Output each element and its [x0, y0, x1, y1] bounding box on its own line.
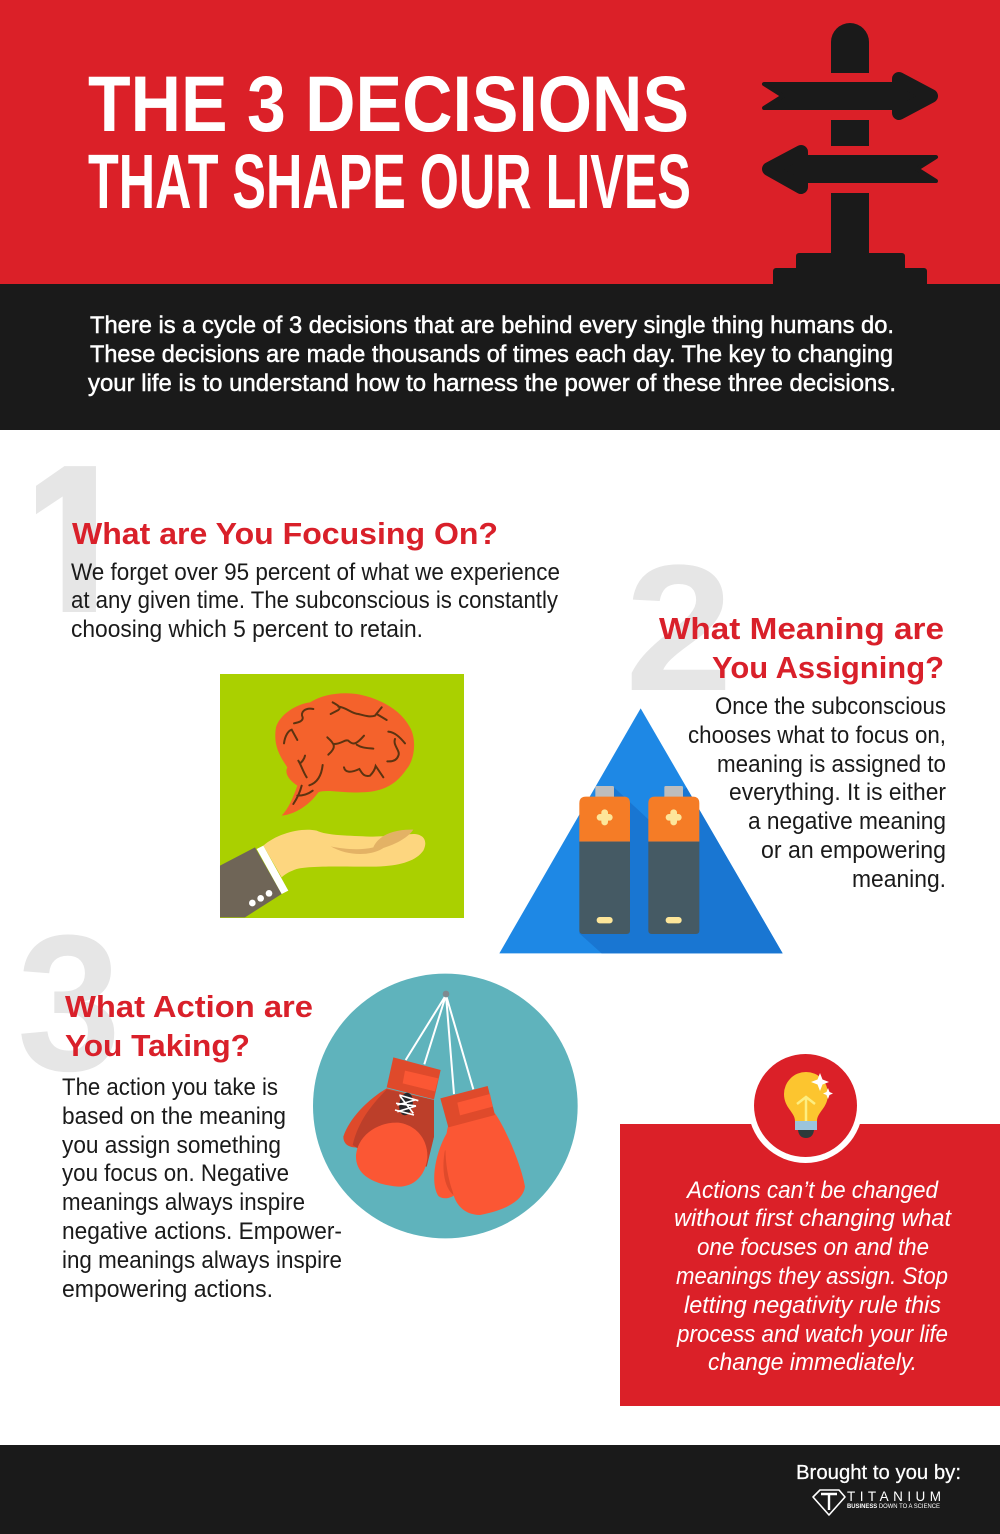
heading: action: [65, 989, 313, 1063]
text: action: you assign something: [62, 1132, 281, 1159]
text: focusing: at any given time. The subconscious is constantly: [71, 587, 558, 614]
intro text: These decisions are made thousands of times each day. The key to changing: [90, 341, 893, 368]
logo: titanium: TITANIUM: [847, 1489, 941, 1504]
heading: meaning: You Assigning?: [712, 650, 944, 685]
title: THE 3 DECISIONS: [88, 59, 689, 148]
callout text: Actions can’t be changed: [685, 1177, 939, 1204]
icon: light bulb: [748, 1048, 863, 1163]
number 2: 2: [625, 528, 733, 729]
callout text: letting negativity rule this: [684, 1292, 941, 1319]
text: meaning: a negative meaning: [748, 808, 946, 835]
text: action: empowering actions.: [62, 1276, 273, 1303]
text: action: The action you take is: [62, 1074, 278, 1101]
logo: titanium: BUSINESS DOWN TO A SCIENCE: [847, 1503, 941, 1510]
text: focusing: We forget over 95 percent of what we experience: [71, 559, 560, 586]
icon: brain above hand: [220, 674, 464, 918]
footer: [0, 1445, 1000, 1534]
text: action: negative actions. Empower-: [62, 1218, 342, 1245]
title: [88, 59, 691, 225]
intro band: [0, 284, 1000, 430]
text: focusing: [71, 559, 560, 643]
battery left: [579, 786, 630, 934]
text: meaning: Once the subconscious: [715, 693, 946, 720]
callout text: meanings they assign. Stop: [676, 1263, 948, 1290]
text: action: ing meanings always inspire: [62, 1247, 342, 1274]
callout text: process and watch your life: [676, 1321, 948, 1348]
text: action: meanings always inspire: [62, 1189, 305, 1216]
text: action: based on the meaning: [62, 1103, 286, 1130]
left glove: [343, 1057, 441, 1187]
intro text: [88, 312, 896, 397]
text: meaning: meaning is assigned to: [717, 751, 946, 778]
number 3: 3: [17, 895, 121, 1112]
brought to you by: Brought to you by:: [796, 1462, 961, 1484]
text: meaning: meaning.: [852, 866, 946, 893]
icon: signpost: [764, 23, 936, 284]
laces: [406, 995, 473, 1094]
heading: action: What Action are: [65, 989, 313, 1024]
header banner: [0, 0, 1000, 284]
text: focusing: choosing which 5 percent to retain.: [71, 616, 423, 643]
callout text: change immediately.: [708, 1349, 917, 1376]
hand: [220, 830, 425, 917]
icon: boxing gloves in circle: [313, 974, 578, 1238]
callout text: one focuses on and the: [697, 1234, 929, 1261]
text: action: you focus on. Negative: [62, 1160, 289, 1187]
right glove: [434, 1086, 525, 1215]
logo: titanium: [813, 1489, 941, 1515]
text: meaning: or an empowering: [761, 837, 946, 864]
heading: meaning: [659, 611, 944, 685]
text: meaning: everything. It is either: [729, 779, 946, 806]
callout text: [674, 1177, 952, 1376]
intro text: There is a cycle of 3 decisions that are behind every single thing humans do.: [90, 312, 894, 339]
icon: batteries in triangle: [499, 708, 783, 953]
heading: focusing: What are You Focusing On?: [72, 516, 498, 551]
battery right: [648, 786, 699, 934]
brain: [275, 693, 414, 816]
heading: meaning: What Meaning are: [659, 611, 944, 646]
callout panel: [620, 1048, 1000, 1406]
intro text: your life is to understand how to harness the power of these three decisions.: [88, 370, 896, 397]
text: meaning: chooses what to focus on,: [688, 722, 946, 749]
heading: action: You Taking?: [65, 1028, 250, 1063]
text: meaning: [688, 693, 946, 893]
number 1: 1: [6, 411, 141, 701]
text: action: [62, 1074, 342, 1303]
callout text: without first changing what: [674, 1205, 952, 1232]
title: THAT SHAPE OUR LIVES: [88, 139, 691, 225]
